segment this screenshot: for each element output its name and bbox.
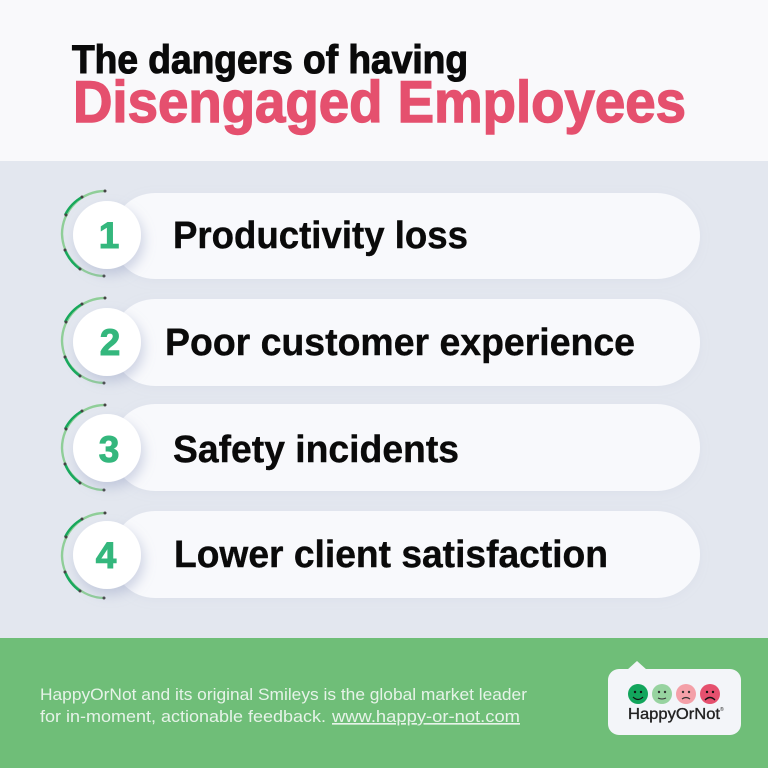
- icon: very unhappy smiley: [700, 684, 720, 704]
- icon: happy smiley: [652, 684, 672, 704]
- item 1: productivity loss: Productivity loss: [173, 215, 468, 257]
- item 3: safety incidents: Safety incidents: [173, 429, 459, 471]
- header panel: [0, 0, 768, 161]
- icon: very happy smiley: [628, 684, 648, 704]
- footer text: www.happy-or-not.com: [331, 708, 520, 726]
- list panel: [0, 161, 768, 638]
- item 1: productivity loss: 1: [99, 215, 119, 256]
- footer text: [40, 686, 528, 726]
- item 4: lower client satisfaction: 4: [96, 535, 117, 576]
- item 2: poor customer experience: Poor customer experience: [165, 322, 635, 364]
- logo wordmark: HappyOrNot: [628, 706, 721, 723]
- footer text: HappyOrNot and its original Smileys is the global market leader: [40, 686, 528, 704]
- item 2: poor customer experience: [62, 296, 700, 386]
- title: Disengaged Employees: [73, 70, 686, 135]
- icon: unhappy smiley: [676, 684, 696, 704]
- title: [72, 38, 686, 135]
- item 4: lower client satisfaction: [62, 511, 700, 600]
- title: The dangers of having: [72, 38, 468, 82]
- footer panel: [0, 638, 768, 768]
- item 4: lower client satisfaction: Lower client satisfaction: [174, 534, 608, 576]
- item 1: productivity loss: [62, 190, 700, 279]
- item 3: safety incidents: 3: [99, 429, 119, 470]
- logo: [608, 661, 741, 735]
- item 2: poor customer experience: 2: [100, 322, 120, 363]
- footer text: for in-moment, actionable feedback.: [40, 708, 326, 726]
- item 3: safety incidents: [62, 404, 700, 492]
- logo: ®: [720, 706, 724, 713]
